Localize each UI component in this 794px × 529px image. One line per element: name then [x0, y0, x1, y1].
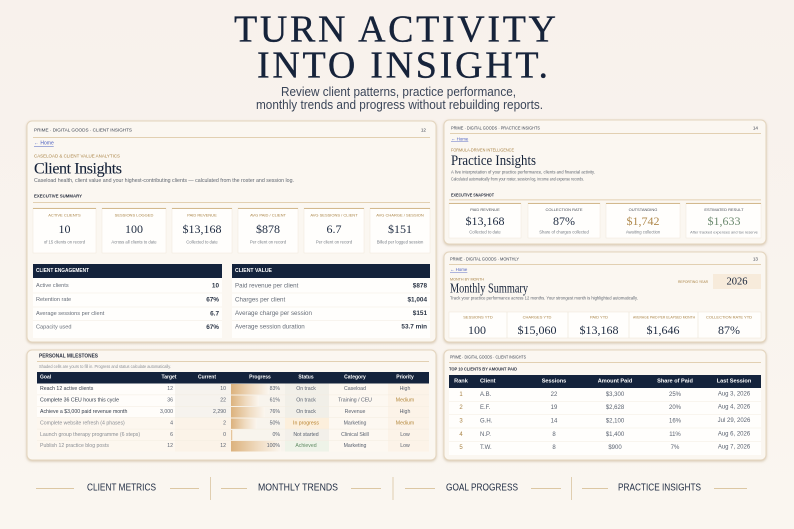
table: client value: Average session duration [235, 324, 305, 330]
milestones table: Not started [293, 432, 319, 438]
ytd strip: $15,060 [518, 323, 556, 337]
table: client engagement: Average sessions per client [36, 311, 105, 317]
kpi cards: $151 [388, 222, 412, 236]
top clients table: Jul 29, 2026 [718, 418, 751, 424]
top clients table: 19 [551, 405, 558, 411]
kpi cards: $13,168 [182, 222, 222, 236]
top clients table: $2,628 [606, 405, 625, 411]
heading: practice insights: Practice Insights [451, 153, 536, 169]
milestones table: Clinical Skill [341, 432, 369, 438]
panel: client insights: EXECUTIVE SUMMARY [34, 194, 83, 200]
milestones table: 76% [270, 409, 280, 415]
milestones table: Launch group therapy programme (6 steps) [40, 432, 140, 438]
table: client engagement [33, 264, 222, 338]
top clients table: 22 [551, 392, 558, 398]
panel: practice insights: 14 [753, 126, 758, 130]
table: client value: CLIENT VALUE [235, 268, 273, 274]
table: client engagement: 10 [212, 282, 219, 290]
table: client engagement: 6.7 [210, 310, 219, 318]
top clients table: 16% [669, 418, 682, 424]
milestones table: 4 [170, 420, 173, 426]
panel: personal milestones: Shaded cells are yours to fill in. Progress and status calculate automatically. [39, 364, 171, 369]
kpi cards: AVG SESSIONS / CLIENT [310, 212, 358, 218]
ytd strip: PAID YTD [590, 314, 608, 320]
kpi cards: SESSIONS LOGGED [115, 212, 153, 218]
panel: practice insights: EXECUTIVE SNAPSHOT [451, 192, 494, 198]
reporting year [678, 274, 761, 289]
milestones table: High [400, 409, 410, 415]
ytd strip: AVERAGE PAID PER ELAPSED MONTH [633, 314, 695, 320]
top clients table: Client [480, 378, 496, 384]
table: client value: Average charge per session [235, 310, 312, 317]
top clients table: Last Session [717, 378, 752, 384]
top clients table: E.F. [480, 405, 491, 411]
snapshot cards: OUTSTANDING [629, 207, 657, 212]
subtitle: monthly trends and progress without rebuilding reports. [256, 98, 543, 112]
table: client engagement: Capacity used [36, 324, 71, 330]
snapshot cards: ESTIMATED RESULT [704, 207, 744, 212]
panel: client insights: Caseload health, client value and your highest-contributing clients — calculated from the roster and session log. [34, 178, 294, 184]
table: client engagement: 67% [206, 324, 219, 331]
table: client value: Charges per client [235, 296, 285, 304]
breadcrumb: PRIME · DIGITAL GOODS · CLIENT INSIGHTS [34, 128, 132, 132]
snapshot cards: $1,633 [708, 214, 740, 228]
snapshot cards: Collected to date [469, 230, 501, 234]
subtitle: Review client patterns, practice performance, [281, 85, 516, 99]
top clients table: 11% [669, 432, 681, 438]
panel: client insights [27, 121, 436, 342]
milestones table: 50% [270, 420, 280, 426]
heading: monthly summary: Monthly Summary [450, 280, 528, 296]
top clients table: A.B. [480, 392, 492, 398]
milestones table: High [400, 386, 410, 392]
top clients table: 1 [459, 392, 463, 398]
milestones table: Medium [396, 420, 414, 426]
ytd strip [449, 312, 761, 338]
milestones table: On track [296, 398, 316, 404]
panel: client insights: 12 [421, 128, 426, 132]
snapshot cards: After tracked expenses and tax reserve [690, 230, 758, 234]
milestones table: Priority [396, 374, 414, 380]
top clients table: 3 [459, 418, 463, 424]
panel: monthly summary: MONTH BY MONTH [450, 276, 484, 282]
kpi cards: Billed per logged session [377, 240, 424, 244]
top clients table: $2,100 [606, 418, 625, 424]
footer feature strip [36, 477, 747, 500]
kpi cards: $878 [256, 222, 280, 236]
top clients table: 14 [551, 418, 558, 424]
snapshot cards: COLLECTION RATE [545, 207, 583, 212]
panel: client insights: ← Home [34, 140, 54, 146]
panel: practice insights [444, 120, 766, 244]
top clients table: $1,400 [606, 432, 625, 438]
top clients table: 8 [552, 432, 556, 438]
milestones table: 6 [170, 432, 173, 438]
table: client value: Paid revenue per client [235, 282, 299, 290]
snapshot cards: 87% [553, 214, 575, 228]
milestones table: 22 [220, 398, 226, 404]
heading: client insights: Client Insights [34, 160, 122, 178]
snapshot cards: Share of charges collected [539, 230, 589, 234]
milestones table [37, 372, 429, 452]
footer feature strip: PRACTICE INSIGHTS [618, 482, 701, 494]
milestones table: Current [198, 374, 216, 380]
ytd strip: COLLECTION RATE YTD [706, 314, 752, 320]
snapshot cards: $1,742 [626, 214, 660, 228]
table: client value: $878 [413, 282, 427, 290]
kpi cards [33, 208, 430, 253]
panel: top clients [444, 350, 766, 460]
kpi cards: PAID REVENUE [187, 212, 217, 218]
table: client value: $1,004 [407, 296, 427, 304]
milestones table: 2 [223, 420, 226, 426]
milestones table: On track [296, 386, 316, 392]
ytd strip: CHARGES YTD [523, 314, 552, 320]
kpi cards: AVG CHARGE / SESSION [376, 212, 424, 218]
panel: monthly summary: 13 [753, 256, 758, 262]
kpi cards: Across all clients to date [111, 240, 157, 244]
reporting year: REPORTING YEAR [678, 279, 708, 284]
top clients table: 5 [459, 445, 463, 451]
kpi cards: AVG PAID / CLIENT [250, 212, 286, 218]
table: client value: 53.7 min [401, 324, 427, 330]
milestones table: Reach 12 active clients [40, 386, 94, 392]
top clients table: Aug 7, 2026 [718, 444, 751, 450]
milestones table: Complete 36 CEU hours this cycle [40, 398, 119, 404]
milestones table: 3,000 [160, 409, 173, 415]
milestones table: Achieved [295, 443, 317, 449]
ytd strip: 87% [718, 323, 740, 337]
top clients table: Share of Paid [657, 378, 693, 384]
milestones table: On track [296, 409, 316, 415]
table: client value: $151 [413, 310, 427, 317]
milestones table: 2,290 [213, 409, 226, 415]
top clients table: 7% [671, 445, 680, 451]
top clients table: Aug 3, 2026 [718, 392, 751, 398]
title: INTO INSIGHT. [257, 44, 548, 86]
milestones table: Achieve a $3,000 paid revenue month [40, 409, 127, 415]
milestones table: 12 [220, 443, 226, 449]
panel: practice insights: ← Home [451, 136, 469, 142]
kpi cards: of 15 clients on record [44, 240, 86, 244]
kpi cards: Per client on record [250, 240, 287, 244]
milestones table: 12 [167, 386, 173, 392]
milestones table: Progress [249, 374, 271, 380]
top clients table: 8 [552, 445, 556, 451]
top clients table [449, 375, 761, 455]
kpi cards: 10 [58, 222, 70, 236]
kpi cards: 6.7 [326, 222, 342, 236]
milestones table: 36 [167, 398, 173, 404]
footer feature strip: CLIENT METRICS [87, 482, 156, 494]
milestones table: Complete website refresh (4 phases) [40, 420, 125, 426]
panel: practice insights: A live interpretation of your practice performance, clients and financial activity. [451, 170, 595, 174]
milestones table: 100% [267, 443, 280, 449]
top clients table: 4 [459, 432, 463, 438]
table: client engagement: Active clients [36, 283, 69, 289]
top clients table: 25% [669, 392, 682, 398]
milestones table: Low [400, 432, 410, 438]
milestones table: 10 [220, 386, 226, 392]
panel: personal milestones [27, 350, 436, 460]
panel: practice insights: Calculated automatically from your roster, session log, income and expense records. [451, 176, 584, 182]
top clients table: Aug 6, 2026 [718, 432, 751, 438]
milestones table: 0 [223, 432, 226, 438]
top clients table: Aug 4, 2026 [718, 404, 751, 410]
milestones table: Status [298, 374, 314, 380]
snapshot cards: PAID REVENUE [470, 207, 500, 212]
kpi cards: Per client on record [316, 240, 353, 244]
title: TURN ACTIVITY [234, 8, 556, 50]
milestones table: Training / CEU [338, 398, 372, 404]
panel: personal milestones: PERSONAL MILESTONES [39, 354, 99, 360]
panel: monthly summary: PRIME · DIGITAL GOODS · MONTHLY [450, 256, 519, 262]
top clients table: 2 [459, 405, 463, 411]
snapshot cards: $13,168 [466, 214, 504, 228]
table: client engagement: Retention rate [36, 297, 71, 303]
top clients table: N.P. [480, 432, 491, 438]
table: client engagement: CLIENT ENGAGEMENT [36, 268, 89, 274]
progress bars [231, 384, 281, 452]
ytd strip: $13,168 [580, 323, 618, 337]
top clients table: Sessions [542, 378, 566, 384]
table: client value [232, 264, 430, 338]
top clients table: $900 [608, 445, 622, 451]
table: client engagement: 67% [206, 296, 219, 304]
ytd strip: 100 [468, 323, 486, 337]
milestones table: Revenue [345, 409, 365, 415]
panel: client insights: CASELOAD & CLIENT VALUE ANALYTICS [34, 154, 120, 160]
kpi cards: 100 [125, 222, 143, 236]
panel: top clients: TOP 10 CLIENTS BY AMOUNT PAID [449, 366, 517, 372]
top clients table: 20% [669, 405, 682, 411]
milestones table: 0% [272, 432, 280, 438]
milestones table: 83% [270, 386, 280, 392]
top clients table: T.W. [480, 445, 492, 451]
milestones table: Target [162, 374, 177, 380]
footer feature strip: GOAL PROGRESS [446, 482, 518, 494]
milestones table: Goal [40, 374, 52, 380]
milestones table: Publish 12 practice blog posts [40, 443, 109, 449]
subtitle [256, 85, 543, 112]
milestones table: 61% [270, 398, 280, 404]
ytd strip: $1,646 [646, 323, 680, 337]
ytd strip: SESSIONS YTD [463, 314, 493, 320]
top clients table: Amount Paid [598, 378, 633, 384]
footer feature strip: MONTHLY TRENDS [258, 482, 338, 494]
kpi cards: Collected to date [186, 240, 218, 244]
panel: top clients: PRIME · DIGITAL GOODS · CLIENT INSIGHTS [450, 354, 526, 360]
milestones table: Caseload [344, 386, 366, 392]
milestones table: Category [344, 374, 366, 380]
panel: monthly summary: ← Home [450, 267, 468, 272]
top clients table: $3,300 [606, 392, 625, 398]
panel: monthly summary: Track your practice performance across 12 months. Your strongest month is highlighted automatically. [450, 296, 638, 300]
milestones table: 12 [167, 443, 173, 449]
top clients table: Rank [454, 378, 469, 384]
panel: practice insights: PRIME · DIGITAL GOODS · PRACTICE INSIGHTS [451, 126, 540, 130]
panel: practice insights: FORMULA-DRIVEN INTELLIGENCE [451, 148, 514, 152]
milestones table: In progress [293, 420, 319, 426]
milestones table: Marketing [344, 420, 367, 426]
snapshot cards: Awaiting collection [626, 230, 661, 234]
kpi cards: ACTIVE CLIENTS [48, 212, 81, 218]
reporting year: 2026 [726, 276, 748, 288]
top clients table: G.H. [480, 418, 493, 424]
milestones table: Medium [396, 398, 414, 404]
snapshot cards [449, 203, 761, 238]
milestones table: Low [400, 443, 410, 449]
panel: monthly summary [444, 252, 766, 342]
milestones table: Marketing [344, 443, 367, 449]
title [234, 8, 556, 86]
